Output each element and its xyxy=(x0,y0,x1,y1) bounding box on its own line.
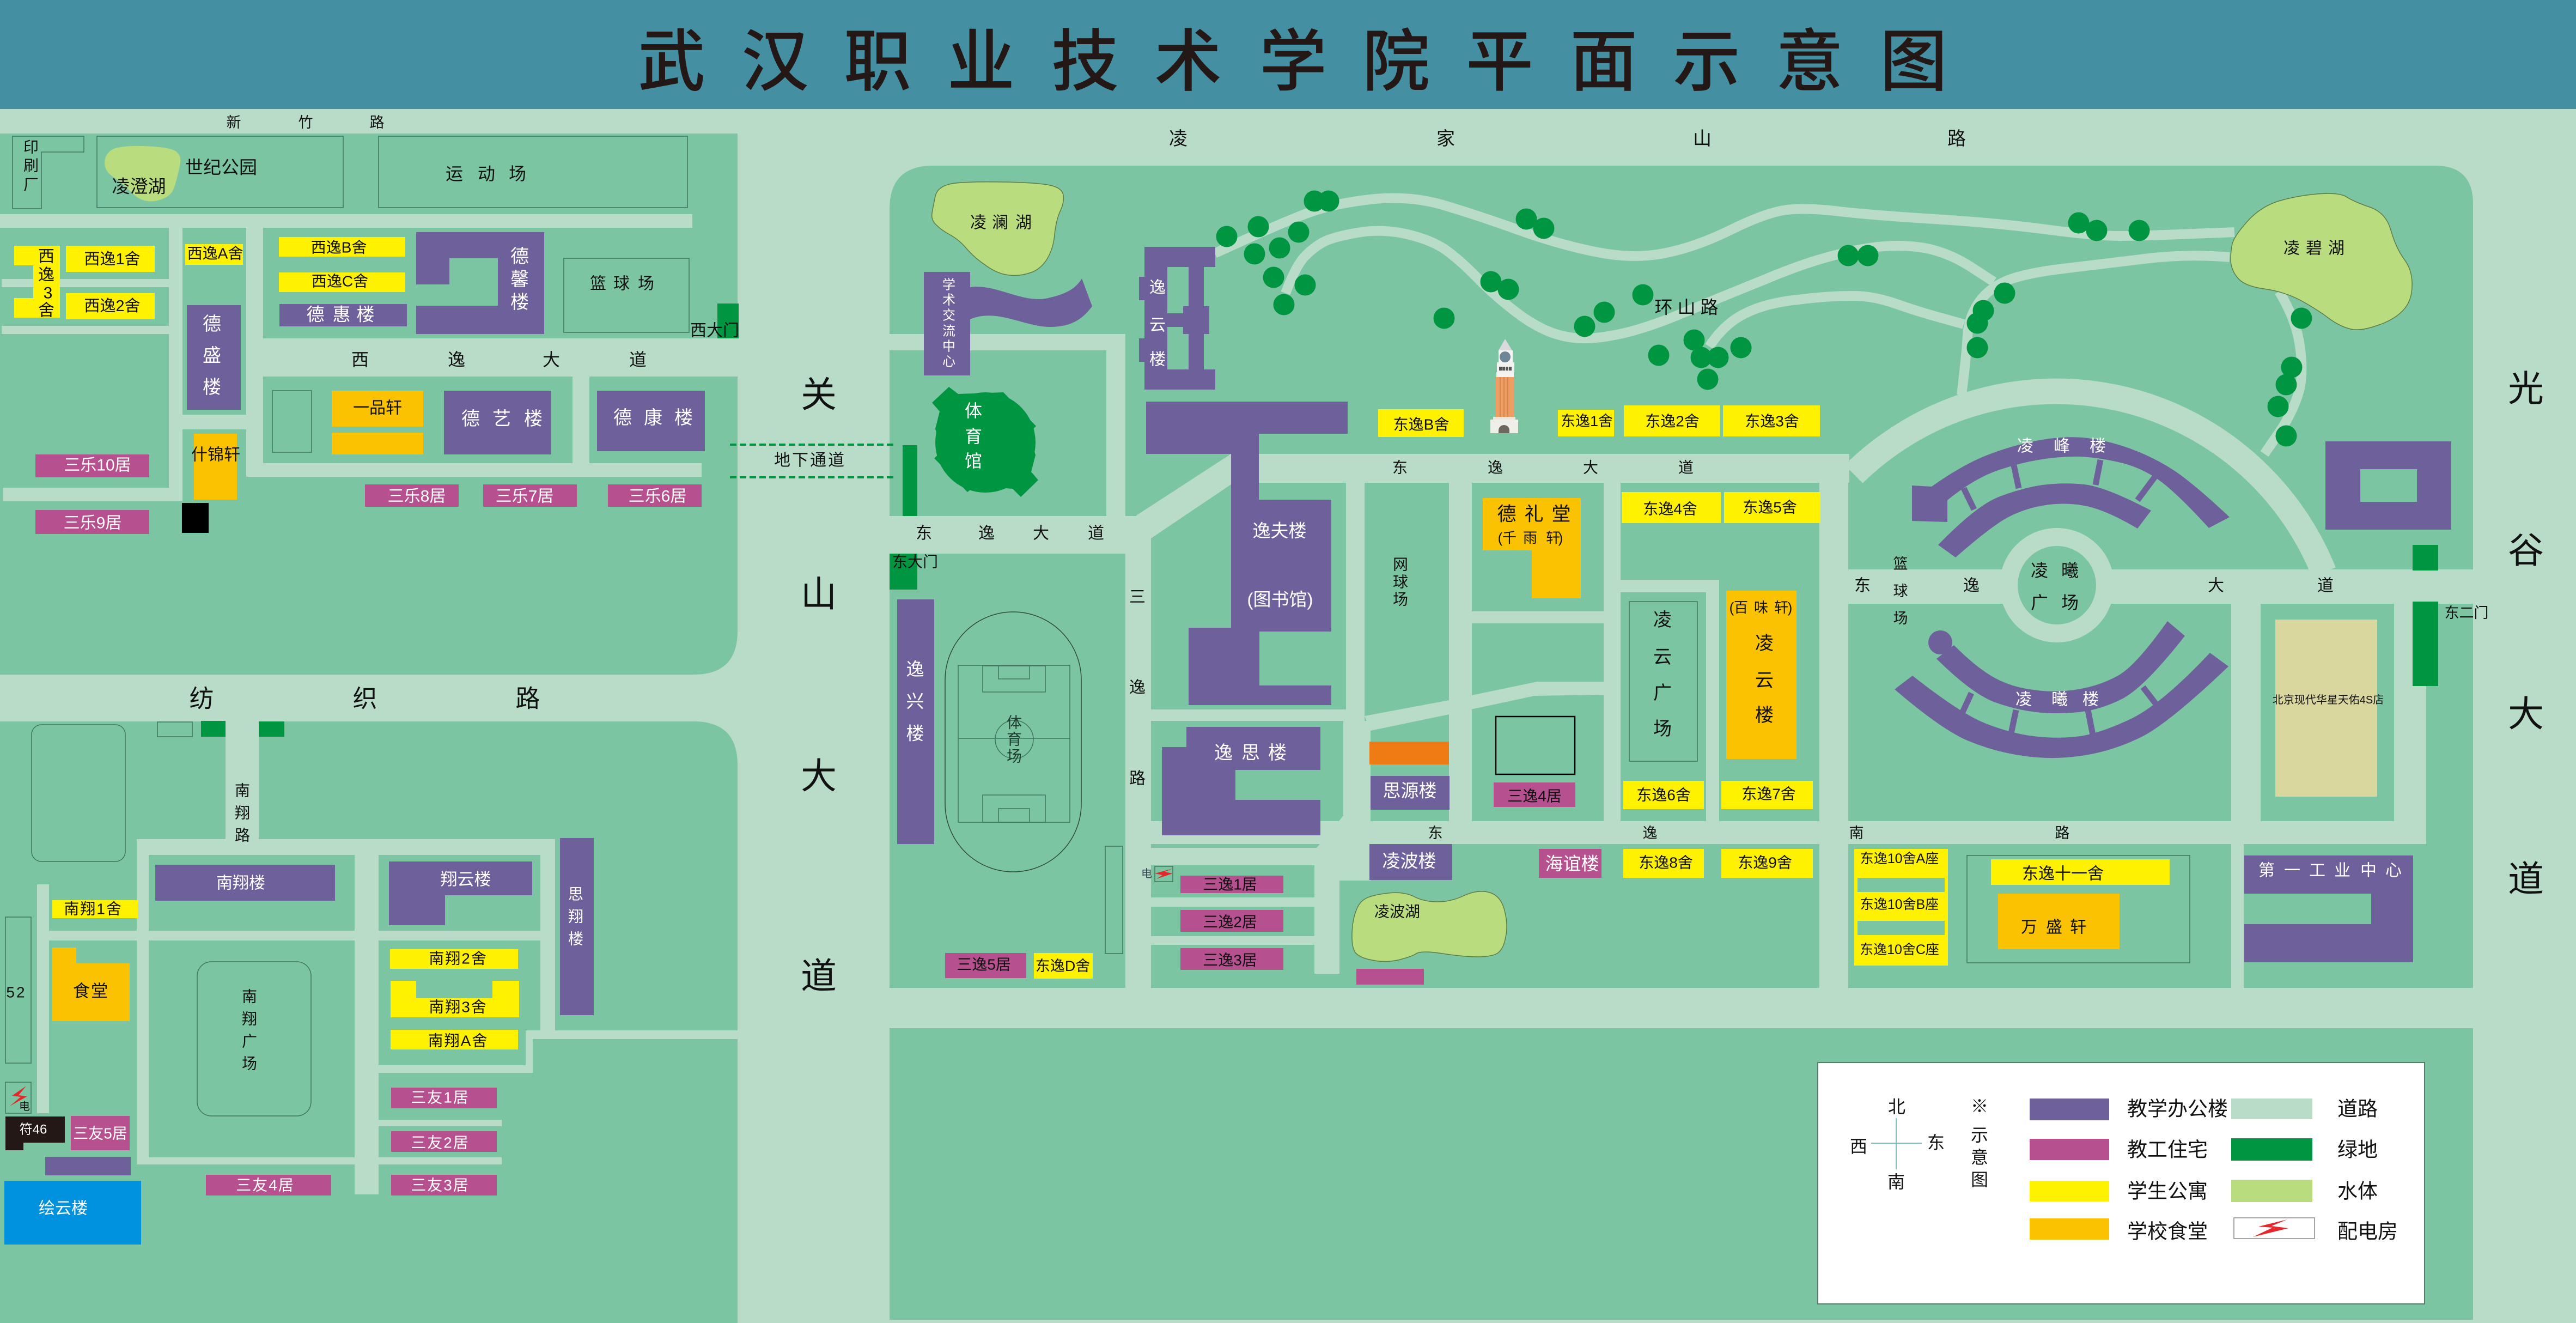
sports field outline xyxy=(32,725,125,861)
运动场 xyxy=(379,136,687,208)
dorm: 东逸4舍: 东逸4舍 xyxy=(1643,500,1697,518)
plaza: 南翔广场 xyxy=(197,962,311,1116)
building: 凌峰楼 xyxy=(1912,437,2230,557)
building: 凌曦楼 xyxy=(1895,621,2228,758)
compass: 北 xyxy=(1888,1097,1905,1116)
road label: 凌家山路: 凌家山路 xyxy=(1169,129,1966,149)
housing: 三友2居: 三友2居 xyxy=(411,1134,470,1151)
dorm: 南翔1舍 xyxy=(52,900,138,918)
compound: 东逸十一舍 万盛轩: 东逸十一舍 xyxy=(2022,865,2104,883)
legend: 道路: 道路 xyxy=(2337,1097,2378,1120)
dorm: 西逸A舍: 西逸A舍 xyxy=(187,245,243,262)
canteen: 食堂: 食堂 xyxy=(73,982,109,1000)
dorm: 东逸B舍 xyxy=(1378,409,1464,437)
road label: 东逸大道 upper: 东逸大道 xyxy=(1392,459,1694,476)
印刷厂 xyxy=(13,136,84,209)
small plot and gate greens xyxy=(157,721,284,737)
gate: 东大门 xyxy=(890,554,938,590)
dorm: 南翔2舍: 南翔2舍 xyxy=(429,950,488,967)
legend: 教学办公楼 xyxy=(2030,1097,2228,1120)
icon: power room west: 电 xyxy=(19,1100,30,1113)
compass: 西 xyxy=(1850,1137,1867,1156)
篮球场 xyxy=(564,258,689,332)
plaza: 凌云广场: 凌云广场 xyxy=(1653,610,1672,739)
dorm: 东逸6舍: 东逸6舍 xyxy=(1636,787,1691,803)
empty plot outline xyxy=(272,391,312,452)
canteen: 什锦轩: 什锦轩 xyxy=(191,446,240,464)
compound: 东逸十一舍 万盛轩: 万盛轩 xyxy=(2021,919,2086,936)
canteen: 一品轩: 一品轩 xyxy=(353,399,402,417)
building: 第一工业中心 xyxy=(2244,855,2413,962)
dorm: 东逸10舍: 东逸10舍C座 xyxy=(1860,942,1939,957)
building: 第一工业中心: 第一工业中心 xyxy=(2258,862,2402,879)
运动场: 运动场 xyxy=(446,164,526,184)
stadium: 体育场: 体育场 xyxy=(1007,714,1022,765)
housing: 三逸3居 xyxy=(1180,948,1283,970)
dorm: 东逸7舍: 东逸7舍 xyxy=(1741,786,1796,802)
court outline xyxy=(1496,717,1575,774)
building: 德康楼 xyxy=(597,391,705,451)
plot: 52 xyxy=(5,917,31,1063)
housing: 三逸2居 xyxy=(1180,910,1283,932)
building: 德艺楼: 德艺楼 xyxy=(461,409,543,429)
housing: 三逸5居: 三逸5居 xyxy=(957,956,1011,973)
dorm: 东逸4舍 xyxy=(1622,492,1721,523)
note: 示意图: ※示意图 xyxy=(1971,1096,1988,1190)
black block xyxy=(182,503,209,533)
legend: 学生公寓: 学生公寓 xyxy=(2127,1180,2208,1202)
legend: 配电房 xyxy=(2234,1218,2398,1242)
dorm: 东逸D舍 xyxy=(1034,953,1093,979)
building: 逸兴楼 xyxy=(897,599,934,844)
lake: 凌澜湖: 凌澜湖 xyxy=(970,214,1032,232)
building: east square block xyxy=(2325,441,2451,530)
trees xyxy=(1216,191,2312,447)
housing: 三友4居 xyxy=(206,1175,331,1195)
plaza: 南翔广场: 南翔广场 xyxy=(242,988,257,1072)
icon: clock tower xyxy=(1490,339,1518,433)
building: 绘云楼: 绘云楼 xyxy=(39,1200,88,1217)
compass xyxy=(1850,1097,1945,1192)
housing: unlabelled strip xyxy=(1356,969,1424,985)
plaza ring: 凌曦广场 xyxy=(2000,528,2114,642)
housing: 三乐10居 xyxy=(35,454,149,477)
dorm: 南翔3舍: 南翔3舍 xyxy=(429,998,488,1016)
building: 逸云楼 xyxy=(1139,247,1215,390)
housing: 三友1居: 三友1居 xyxy=(411,1089,470,1106)
dorm: 南翔A舍 xyxy=(391,1030,518,1049)
road label: 西逸大道: 西逸大道 xyxy=(351,350,647,369)
title: 武汉职业技术学院平面示意图 xyxy=(638,25,1947,100)
road label: 东逸南路: 东逸南路 xyxy=(1428,825,2070,841)
dorm: 南翔1舍: 南翔1舍 xyxy=(64,900,123,918)
housing: 三乐8居: 三乐8居 xyxy=(388,487,446,506)
housing: 三友4居: 三友4居 xyxy=(236,1177,295,1193)
legend: 教学办公楼: 教学办公楼 xyxy=(2127,1097,2228,1120)
housing: 三乐6居: 三乐6居 xyxy=(629,487,686,506)
印刷厂: 印刷厂 xyxy=(23,138,39,193)
housing: 三乐8居 xyxy=(365,484,459,507)
building: 思翔楼: 思翔楼 xyxy=(568,886,583,947)
purple strip xyxy=(45,1157,131,1175)
road label: 新竹路: 新竹路 xyxy=(227,114,385,131)
plaza ring: 凌曦广场: 广场 xyxy=(2031,593,2079,612)
housing: 三乐9居 xyxy=(35,510,149,534)
dorm: 东逸5舍 xyxy=(1724,492,1820,523)
dorm: 东逸5舍: 东逸5舍 xyxy=(1743,499,1797,515)
housing: 三乐6居 xyxy=(608,484,702,507)
世纪公园: 世纪公园 xyxy=(185,157,257,178)
dorm: 西逸B舍 xyxy=(279,237,405,257)
icon: power room west xyxy=(5,1082,31,1113)
legend: 水体: 水体 xyxy=(2337,1180,2378,1202)
building: 南翔楼: 南翔楼 xyxy=(216,874,265,893)
trail roads xyxy=(1215,198,2301,454)
building: 绘云楼 xyxy=(4,1181,141,1245)
legend: 教工住宅 xyxy=(2030,1139,2208,1161)
canteen: 凌云楼 百味轩 xyxy=(1726,591,1796,759)
canteen: 德礼堂 千雨轩: 德礼堂 xyxy=(1497,503,1571,525)
dorm: 东逸10舍: 东逸10舍A座 xyxy=(1860,851,1939,866)
header banner xyxy=(0,0,2576,109)
housing: 三乐7居: 三乐7居 xyxy=(496,487,553,506)
canteen: 凌云楼 百味轩: 凌云楼 xyxy=(1755,633,1774,726)
building: 学术交流中心 xyxy=(924,272,1092,375)
compass: 东 xyxy=(1927,1133,1945,1152)
housing: 三友5居 xyxy=(71,1116,130,1150)
legend: 绿地 xyxy=(2231,1138,2378,1161)
legend: 学校食堂: 学校食堂 xyxy=(2127,1221,2208,1242)
compound: 东逸十一舍 万盛轩 xyxy=(1967,855,2190,963)
canteen: 食堂 xyxy=(52,948,130,1021)
dorm: 东逸2舍 xyxy=(1624,405,1720,436)
icon: power room main: 电 xyxy=(1141,867,1152,880)
building: 德馨楼: 德馨楼 xyxy=(510,246,529,313)
road label: 关山大道: 关山大道 xyxy=(801,374,837,996)
gate: 东二门: 东二门 xyxy=(2445,605,2488,621)
label: 篮球场 east: 篮球场 xyxy=(1893,556,1908,627)
building: 逸夫楼 图书馆: 逸夫楼 xyxy=(1253,521,1306,541)
gate: 东二门 xyxy=(2413,545,2488,686)
building: 逸夫楼 图书馆 xyxy=(1146,402,1348,705)
road label: 三逸路: 三逸路 xyxy=(1129,588,1146,788)
building: 体育馆 xyxy=(932,387,1038,497)
housing: 三逸3居: 三逸3居 xyxy=(1203,951,1257,969)
housing: 三逸1居 xyxy=(1180,876,1283,893)
canteen: 德礼堂 千雨轩: (千雨轩) xyxy=(1498,530,1563,546)
housing: 三乐10居: 三乐10居 xyxy=(64,457,131,474)
housing: 三逸1居: 三逸1居 xyxy=(1203,876,1257,893)
road label: 光谷大道: 光谷大道 xyxy=(2508,368,2544,899)
building: 逸夫楼 图书馆: (图书馆) xyxy=(1247,590,1313,609)
dorm: 西逸2舍 xyxy=(66,293,155,319)
building: 德盛楼 xyxy=(187,305,241,410)
underground passage: 地下通道 xyxy=(774,451,846,470)
dorm: 东逸2舍: 东逸2舍 xyxy=(1645,413,1700,429)
dorm: 西逸1舍: 西逸1舍 xyxy=(84,250,141,268)
compass: 南 xyxy=(1887,1172,1905,1192)
4S store xyxy=(2273,620,2384,797)
icon: power room main xyxy=(1141,866,1173,882)
lake: 凌波湖 xyxy=(1352,891,1507,961)
legend: 学校食堂 xyxy=(2030,1218,2208,1242)
building: 逸思楼 xyxy=(1162,727,1320,835)
road label: 东逸大道 west: 东逸大道 xyxy=(916,524,1104,543)
dorm: 西逸2舍: 西逸2舍 xyxy=(84,297,141,315)
building: 翔云楼 xyxy=(389,861,532,925)
canteen: 一品轩 xyxy=(332,391,423,454)
housing: 三友3居 xyxy=(391,1175,497,1195)
gate: 西大门 xyxy=(690,304,739,340)
lake: 凌澄湖: 凌澄湖 xyxy=(112,177,166,196)
dorm: 南翔2舍 xyxy=(390,949,518,969)
legend: 水体 xyxy=(2231,1180,2378,1202)
panel: west campus xyxy=(0,114,739,675)
road label: 纺织路: 纺织路 xyxy=(189,684,540,713)
gate: 西大门: 西大门 xyxy=(690,321,739,340)
building: 凌曦楼: 凌曦楼 xyxy=(2015,691,2099,708)
building: 德惠楼: 德惠楼 xyxy=(306,304,375,325)
housing: 三乐7居 xyxy=(483,484,577,507)
plaza: 凌云广场 xyxy=(1629,602,1697,761)
building: 符46: 符46 xyxy=(20,1122,47,1137)
plaza ring: 凌曦广场: 凌曦 xyxy=(2031,561,2079,580)
building: 思翔楼 xyxy=(560,838,594,1015)
lake: 凌澜湖 xyxy=(932,182,1063,275)
building: 思源楼: 思源楼 xyxy=(1383,780,1437,801)
road label: 南翔路: 南翔路 xyxy=(235,782,250,843)
dorm: 东逸9舍 xyxy=(1721,849,1813,878)
dorm: 西逸1舍 xyxy=(66,246,155,272)
dorm: 东逸7舍 xyxy=(1721,781,1813,809)
canteen: 什锦轩 xyxy=(191,434,240,500)
canteen: 凌云楼 百味轩: (百味轩) xyxy=(1729,599,1792,616)
housing: 三逸2居: 三逸2居 xyxy=(1203,913,1257,931)
housing: 三乐9居: 三乐9居 xyxy=(64,514,121,532)
lake: 凌澄湖 xyxy=(105,146,180,201)
legend: 配电房: 配电房 xyxy=(2337,1221,2398,1242)
dorm: 东逸B舍: 东逸B舍 xyxy=(1393,416,1449,433)
orange block xyxy=(1369,742,1449,764)
building: 凌峰楼: 凌峰楼 xyxy=(2017,437,2106,456)
panel: main campus xyxy=(730,166,2488,988)
gate: 东大门: 东大门 xyxy=(892,554,938,570)
dorm: 东逸8舍 xyxy=(1623,849,1704,878)
4S store: 北京现代华星天佑4S店 xyxy=(2273,694,2384,706)
housing: 三友2居 xyxy=(391,1131,497,1152)
road label: 东逸大道 east: 东逸大道 xyxy=(1854,576,2334,595)
green strip xyxy=(903,445,917,516)
label: 网球场: 网球场 xyxy=(1393,556,1408,608)
housing: 三逸4居 xyxy=(1494,782,1575,807)
building: 德惠楼 xyxy=(279,304,407,326)
housing: 海谊楼 xyxy=(1539,849,1601,878)
panel: south-west campus xyxy=(0,721,738,1323)
dorm: 东逸3舍 xyxy=(1723,405,1820,436)
building: 体育馆: 体育馆 xyxy=(965,401,982,471)
panel: lower campus block xyxy=(890,1028,2473,1320)
dorm: 东逸10舍: 东逸10舍B座 xyxy=(1860,897,1939,912)
plot: 52: 52 xyxy=(6,984,27,1000)
housing: 三逸5居 xyxy=(945,953,1026,978)
panel: legend xyxy=(1818,1063,2425,1304)
dorm: 东逸3舍: 东逸3舍 xyxy=(1745,413,1799,429)
lake: 凌波湖: 凌波湖 xyxy=(1374,903,1420,920)
building: 思源楼 xyxy=(1371,776,1450,810)
building: 凌波楼 xyxy=(1369,844,1452,880)
canteen: 德礼堂 千雨轩 xyxy=(1483,498,1581,598)
building: 逸兴楼: 逸兴楼 xyxy=(906,659,924,743)
dorm: 西逸B舍: 西逸B舍 xyxy=(311,239,367,256)
dorm: 东逸D舍: 东逸D舍 xyxy=(1036,958,1090,974)
dorm: 东逸10舍 xyxy=(1854,849,1948,966)
building: 逸云楼: 逸云楼 xyxy=(1149,279,1166,368)
arc road xyxy=(1854,391,2324,572)
legend: 道路 xyxy=(2231,1097,2378,1120)
building: 翔云楼: 翔云楼 xyxy=(440,870,491,889)
building: 德馨楼 xyxy=(416,232,544,334)
plot outline xyxy=(1105,846,1123,954)
dorm: 东逸8舍: 东逸8舍 xyxy=(1639,854,1693,871)
dorm: 南翔A舍: 南翔A舍 xyxy=(428,1032,488,1049)
dorm: 西逸3舍: 西逸3舍 xyxy=(38,247,54,319)
dorm: 西逸C舍 xyxy=(279,272,405,292)
dorm: 东逸6舍 xyxy=(1623,781,1704,809)
building: 德艺楼 xyxy=(444,391,551,454)
housing: 三友1居 xyxy=(391,1088,497,1108)
housing: 海谊楼: 海谊楼 xyxy=(1545,853,1599,874)
stadium: 体育场 xyxy=(945,612,1081,872)
legend: 教工住宅: 教工住宅 xyxy=(2127,1139,2208,1161)
building: 逸思楼: 逸思楼 xyxy=(1214,743,1287,763)
housing: 三逸4居: 三逸4居 xyxy=(1507,788,1562,804)
legend: 绿地: 绿地 xyxy=(2337,1139,2378,1161)
lake: 凌碧湖 xyxy=(2231,193,2412,330)
building: 凌波楼: 凌波楼 xyxy=(1383,851,1436,871)
road label: 环山路: 环山路 xyxy=(1655,298,1718,317)
世纪公园 xyxy=(97,136,343,208)
dorm: 东逸9舍: 东逸9舍 xyxy=(1738,854,1792,871)
legend: 学生公寓 xyxy=(2030,1180,2208,1202)
building: 南翔楼 xyxy=(155,865,335,901)
building: 德盛楼: 德盛楼 xyxy=(203,314,221,398)
dorm: 东逸1舍 xyxy=(1558,410,1614,436)
housing: 三友3居: 三友3居 xyxy=(411,1177,470,1193)
dorm: 西逸C舍: 西逸C舍 xyxy=(312,272,368,290)
housing: 三友5居: 三友5居 xyxy=(73,1125,127,1142)
building: 学术交流中心: 学术交流中心 xyxy=(942,278,955,369)
dorm: 西逸3舍 xyxy=(14,246,60,319)
building: 符46 xyxy=(5,1116,65,1150)
篮球场: 篮球场 xyxy=(590,275,654,293)
building: 德康楼: 德康楼 xyxy=(613,408,693,428)
dorm: 南翔3舍 xyxy=(391,981,519,1017)
dorm: 东逸1舍: 东逸1舍 xyxy=(1561,413,1613,429)
lake: 凌碧湖: 凌碧湖 xyxy=(2283,240,2344,257)
